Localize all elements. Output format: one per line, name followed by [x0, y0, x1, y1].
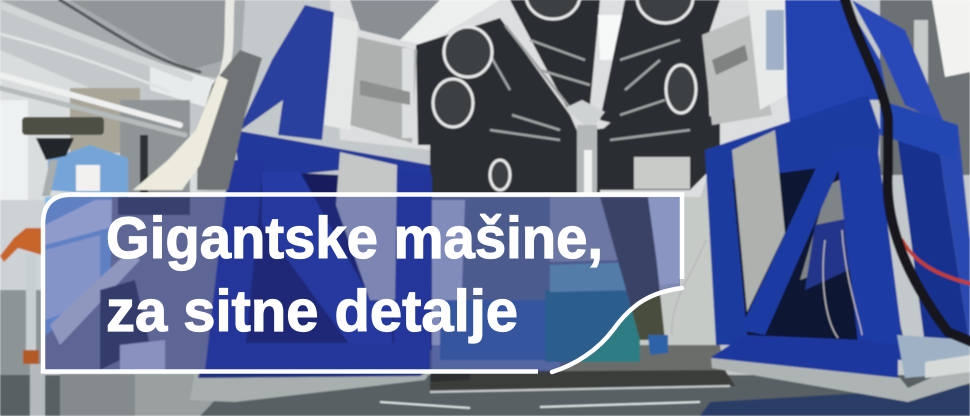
floor	[0, 345, 970, 416]
black and red cables	[844, 0, 970, 342]
right lower background	[640, 197, 740, 350]
left frame base plate	[190, 370, 470, 402]
beige hose	[133, 75, 228, 190]
title line 1: Gigantske mašine,	[106, 206, 603, 271]
panel contents photo layer	[45, 197, 680, 370]
survey instrument	[22, 117, 104, 196]
title	[106, 206, 603, 344]
title line 2: za sitne detalje	[106, 279, 518, 344]
right wall and note	[880, 0, 970, 175]
light service box	[634, 157, 690, 189]
left blue frame	[200, 5, 432, 372]
machine dark spokes	[416, 0, 720, 195]
machine highlights	[490, 25, 690, 140]
gray curved arm	[197, 50, 262, 190]
right frame base plate	[711, 335, 970, 402]
fan rings	[433, 0, 696, 190]
white outline frame with curved corner	[43, 194, 682, 372]
right silver machine head	[702, 0, 787, 125]
translucent blue panel	[45, 197, 682, 372]
centre hub	[565, 100, 605, 195]
ceiling cable trays	[0, 0, 230, 135]
thin wires	[672, 230, 862, 338]
right blue frame	[705, 0, 970, 378]
bright ceiling gap	[598, 15, 622, 60]
centre upper machine background	[330, 0, 800, 200]
orange tripod	[0, 228, 45, 416]
radiation box	[48, 145, 128, 197]
left silver machine head	[324, 16, 417, 143]
